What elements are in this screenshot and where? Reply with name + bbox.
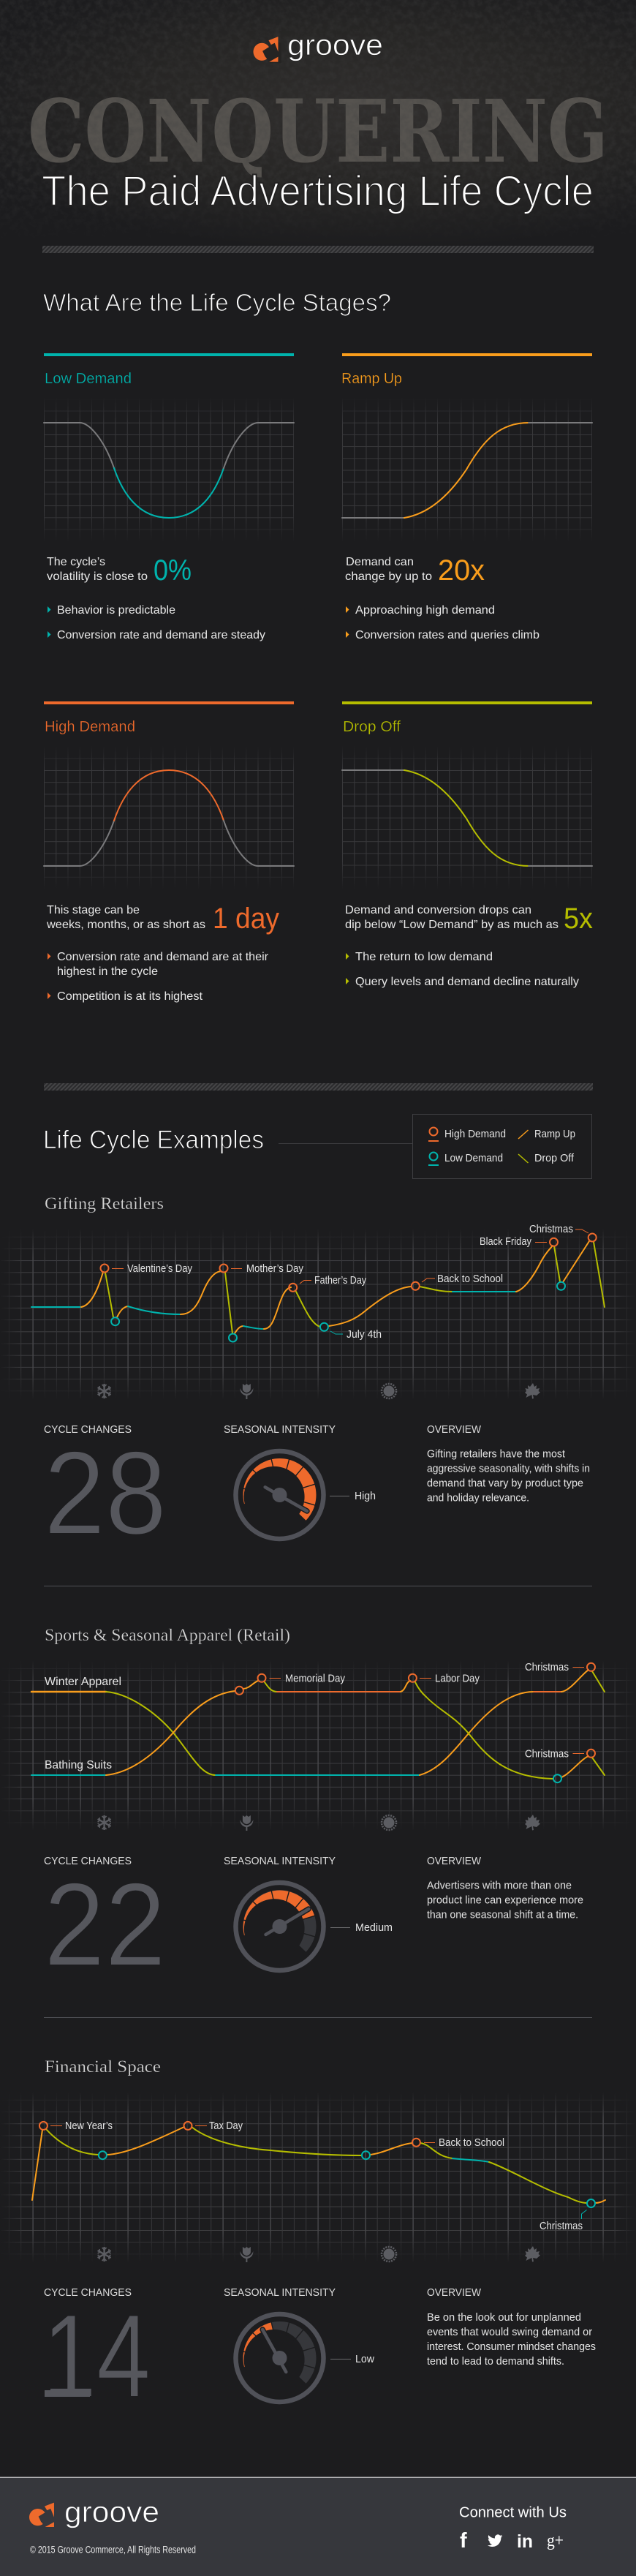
bullets	[346, 604, 540, 641]
gauge: seasonal intensity low	[224, 2286, 374, 2402]
overview text: aggressive seasonality, with shifts in	[427, 1463, 590, 1475]
stat: volatility is close to	[47, 570, 148, 583]
overview text: tend to lead to demand shifts.	[427, 2355, 564, 2368]
bullets	[346, 951, 579, 988]
event labels: Mother’s Day	[246, 1262, 303, 1275]
stat: change by up to	[345, 570, 432, 583]
legend: ramp up	[518, 1128, 575, 1140]
stat: Demand can	[346, 556, 414, 568]
social icons	[460, 2529, 564, 2553]
series labels: Bathing Suits	[45, 1759, 112, 1771]
overview text: OVERVIEW	[427, 1423, 482, 1436]
event labels: Christmas	[525, 1661, 569, 1673]
noise overlay	[0, 0, 636, 196]
bullets: The return to low demand	[355, 951, 493, 963]
stat	[345, 903, 593, 935]
overview text: Gifting retailers have the most	[427, 1448, 566, 1461]
event labels: Christmas	[540, 2220, 583, 2232]
event labels: Christmas	[525, 1747, 569, 1760]
legend: low demand: Low Demand	[444, 1152, 503, 1164]
overview text	[427, 2286, 596, 2368]
stat: cycle changes: CYCLE CHANGES	[44, 2286, 132, 2299]
event labels: Back to School	[437, 1273, 503, 1285]
stat	[47, 554, 192, 587]
stat: Demand and conversion drops can	[345, 904, 531, 916]
overview text: OVERVIEW	[427, 1855, 482, 1867]
overview text: events that would swing demand or	[427, 2326, 592, 2338]
divider bar	[42, 246, 594, 253]
gauge: seasonal intensity low: Low	[355, 2353, 374, 2365]
stage title: High Demand	[45, 719, 135, 735]
panel: drop off	[342, 701, 593, 988]
stage chart	[342, 397, 593, 542]
bullets: Conversion rate and demand are steady	[57, 629, 265, 641]
season icons	[98, 1383, 540, 1399]
event markers	[235, 1663, 595, 1782]
heading: stages: What Are the Life Cycle Stages?	[43, 289, 391, 316]
bullets: Query levels and demand decline naturally	[355, 976, 579, 988]
stat: 1 day	[213, 903, 279, 935]
wordmark: groove	[287, 29, 383, 61]
legend: high demand: High Demand	[444, 1128, 506, 1140]
icon: google plus: g+	[547, 2531, 564, 2550]
legend: drop off: Drop Off	[534, 1152, 575, 1164]
gauge: seasonal intensity medium: SEASONAL INTENSITY	[224, 1855, 336, 1867]
stat	[46, 903, 279, 935]
panel: low demand	[44, 353, 295, 641]
overview text: OVERVIEW	[427, 2286, 482, 2299]
event labels	[112, 1223, 588, 1341]
event labels	[269, 1661, 584, 1760]
stage title: Ramp Up	[341, 371, 402, 387]
gauge: seasonal intensity low: SEASONAL INTENSITY	[224, 2286, 336, 2299]
event labels	[50, 2120, 586, 2232]
panel: ramp up	[341, 353, 593, 641]
stage chart	[44, 746, 295, 889]
event labels: Tax Day	[209, 2120, 243, 2132]
stat: weeks, months, or as short as	[46, 919, 205, 931]
stat: 5x	[564, 903, 593, 935]
event markers	[101, 1233, 597, 1341]
event labels: Christmas	[529, 1223, 573, 1235]
demand curve	[32, 2127, 605, 2203]
stat: cycle changes: CYCLE CHANGES	[44, 1855, 132, 1867]
line chart	[0, 2092, 636, 2263]
section: financial space	[0, 2057, 636, 2422]
series labels	[45, 1676, 121, 1771]
stat: cycle changes: 22	[44, 1858, 166, 1991]
legend: high demand	[428, 1128, 506, 1142]
logo: groove	[253, 29, 383, 63]
overview text: interest. Consumer mindset changes	[427, 2340, 596, 2353]
icon: groove mark	[253, 37, 281, 63]
wordmark: groove	[64, 2496, 159, 2528]
subtitle: The Paid Advertising Life Cycle	[42, 167, 594, 215]
demand curve	[31, 1241, 605, 1333]
bullets: Behavior is predictable	[57, 604, 175, 617]
bullets	[48, 604, 265, 641]
footer	[0, 2477, 636, 2576]
stat: cycle changes: 28	[44, 1427, 167, 1559]
gauge: seasonal intensity high: SEASONAL INTENSITY	[224, 1423, 336, 1436]
stage chart	[44, 397, 295, 542]
bullets: Conversion rates and queries climb	[355, 629, 540, 641]
icon: twitter	[488, 2534, 502, 2547]
bullets: Competition is at its highest	[57, 990, 203, 1003]
line chart	[0, 1660, 636, 1831]
legend	[412, 1115, 592, 1179]
stat: This stage can be	[47, 904, 140, 916]
icon: facebook: f	[460, 2529, 467, 2553]
overview text: Advertisers with more than one	[427, 1880, 572, 1892]
stage chart	[342, 746, 593, 889]
stat: dip below “Low Demand” by as much as	[345, 919, 559, 931]
bathing suits curve	[31, 1681, 605, 1779]
bullets: Conversion rate and demand are at their	[57, 951, 269, 963]
overview text: and holiday relevance.	[427, 1492, 529, 1504]
stat: cycle changes: CYCLE CHANGES	[44, 1423, 132, 1436]
divider bar	[44, 1083, 593, 1091]
bullets	[48, 951, 269, 1003]
legend: low demand	[428, 1152, 503, 1166]
stat: 0%	[154, 554, 192, 587]
bullets: Approaching high demand	[355, 604, 495, 617]
overview text: product line can experience more	[427, 1894, 583, 1907]
gauge: seasonal intensity high: High	[355, 1490, 376, 1502]
event labels: Memorial Day	[285, 1672, 345, 1684]
event labels: Valentine’s Day	[127, 1262, 192, 1275]
series labels: Winter Apparel	[45, 1676, 121, 1688]
stage title: Drop Off	[343, 719, 401, 735]
line chart	[0, 1223, 636, 1400]
stage title: Low Demand	[45, 371, 132, 387]
overview text: demand that vary by product type	[427, 1477, 583, 1490]
gauge: seasonal intensity high	[224, 1423, 376, 1539]
event labels: July 4th	[347, 1328, 382, 1341]
section: sports and seasonal apparel	[0, 1626, 636, 1991]
section title: Financial Space	[45, 2057, 161, 2076]
overview text: Be on the look out for unplanned	[427, 2311, 581, 2324]
stat: 20x	[438, 554, 485, 587]
legend: ramp up: Ramp Up	[534, 1128, 575, 1140]
footer logo	[29, 2496, 159, 2528]
panel: high demand	[44, 701, 295, 1003]
stat	[345, 554, 485, 587]
stat: The cycle’s	[47, 556, 105, 568]
gauge: seasonal intensity medium: Medium	[355, 1921, 393, 1934]
section title: Gifting Retailers	[45, 1194, 164, 1213]
season icons	[98, 2246, 540, 2262]
overview text	[427, 1423, 590, 1504]
icon: groove mark	[29, 2503, 57, 2528]
section title: Sports & Seasonal Apparel (Retail)	[45, 1626, 290, 1644]
winter apparel curve	[31, 1670, 605, 1775]
legend: drop off	[518, 1152, 575, 1164]
copyright: © 2015 Groove Commerce, All Rights Reserved	[30, 2545, 196, 2556]
bullets: highest in the cycle	[57, 965, 158, 978]
season icons	[98, 1815, 540, 1831]
event labels: New Year’s	[65, 2120, 113, 2132]
stat: cycle changes: 14	[42, 2290, 151, 2422]
header texture	[0, 0, 636, 245]
overview text	[427, 1855, 583, 1921]
event labels: Back to School	[439, 2136, 504, 2149]
section: gifting retailers	[0, 1194, 636, 1559]
gauge: seasonal intensity medium	[224, 1855, 393, 1970]
event labels: Labor Day	[435, 1672, 480, 1684]
event labels: Black Friday	[480, 1235, 531, 1248]
event labels: Father’s Day	[314, 1274, 366, 1287]
overview text: than one seasonal shift at a time.	[427, 1909, 578, 1921]
event markers	[39, 2122, 595, 2207]
social heading: Connect with Us	[459, 2504, 567, 2520]
icon: linkedin: in	[517, 2531, 533, 2552]
header	[0, 0, 636, 245]
heading: examples: Life Cycle Examples	[43, 1126, 264, 1154]
